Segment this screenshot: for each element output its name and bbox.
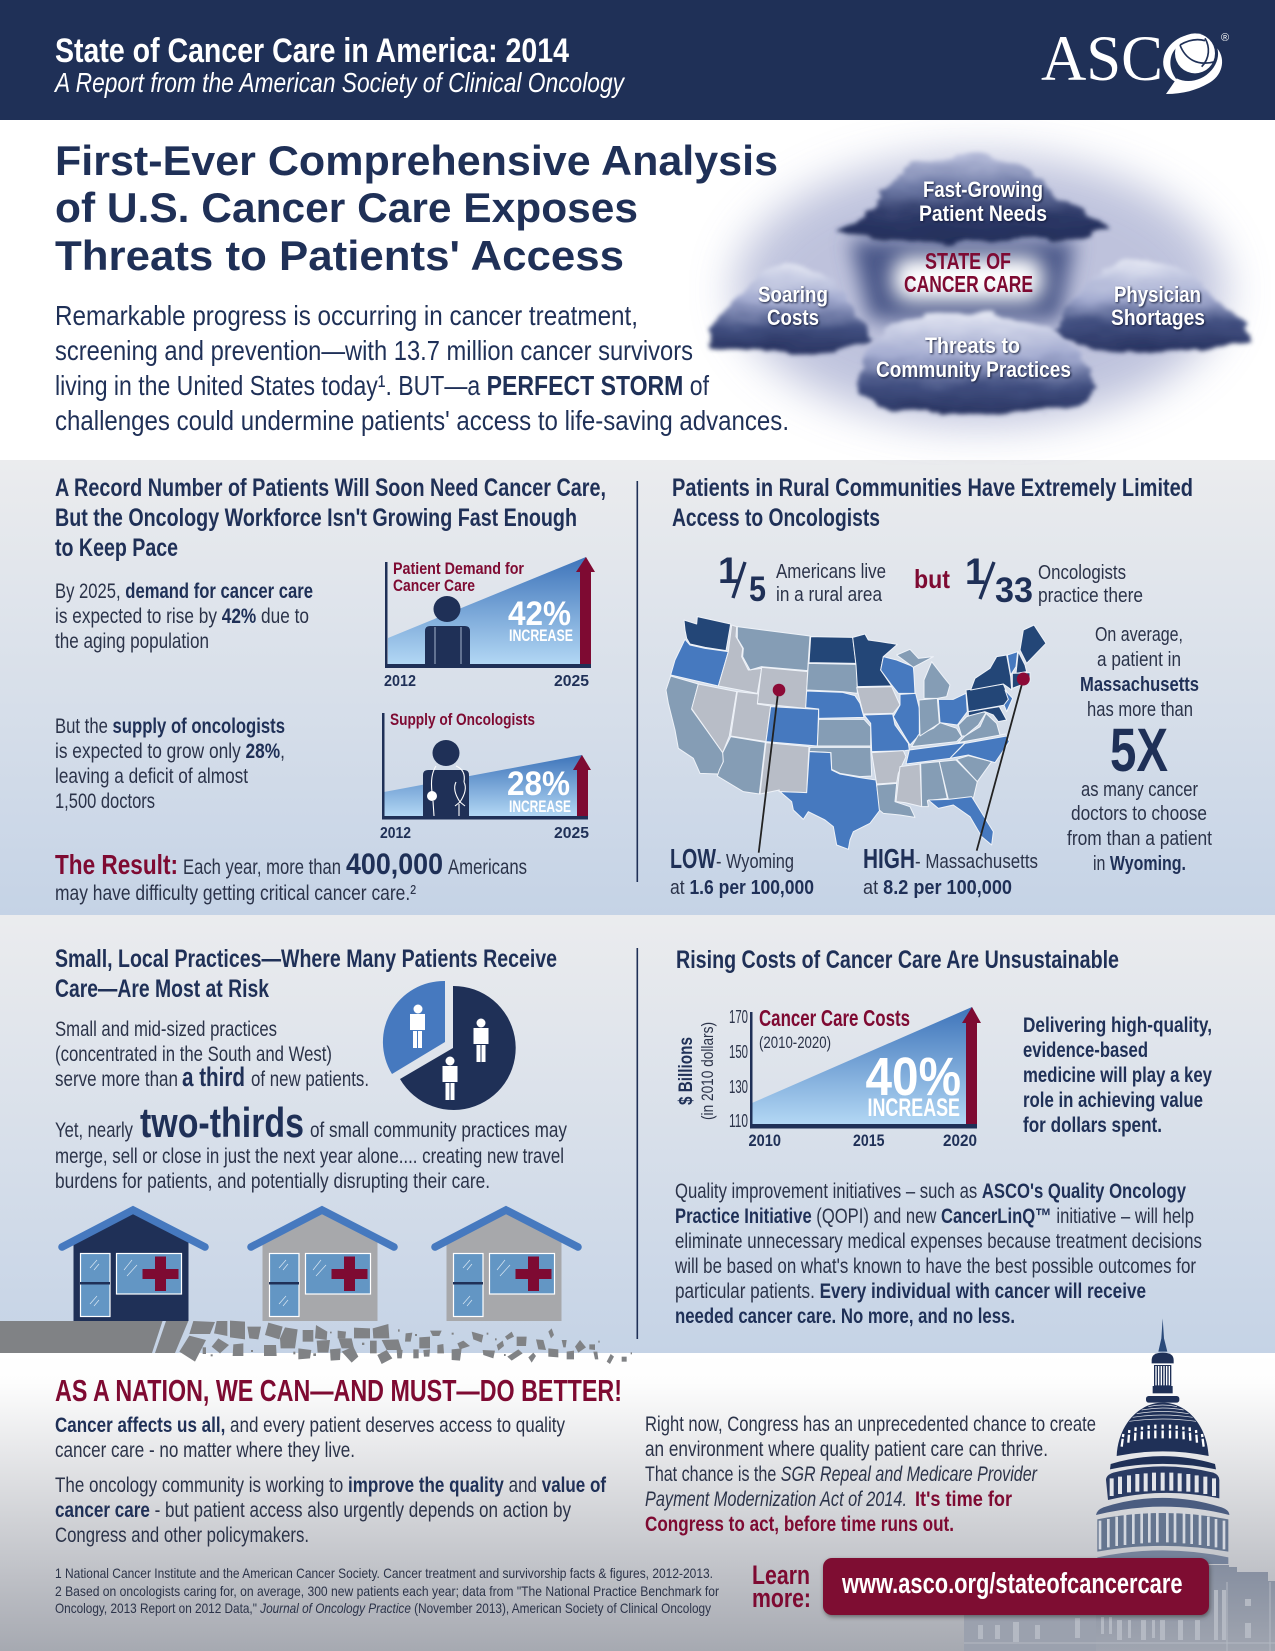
text: two-thirds at risk: burdens for patients, and potentially disrupting their care. <box>55 1170 490 1193</box>
icon: person <box>410 1004 425 1048</box>
callout: five times comparison: On average, <box>1095 623 1183 646</box>
text: cancer affects us all: Cancer affects us all, and every patient deserves access to quality <box>55 1414 565 1437</box>
building wings <box>964 1565 1275 1651</box>
band: first section background <box>0 460 1275 915</box>
chart: oncologist supply: INCREASE <box>509 797 571 816</box>
upper peristyle <box>1106 1466 1219 1500</box>
text: quality initiatives <box>674 1180 1202 1328</box>
chart: cancer care costs: (2010-2020) <box>759 1033 831 1052</box>
chart: patient demand: 42% <box>508 595 571 633</box>
chart: oncologist supply: 2012 <box>380 825 411 842</box>
text: congress: Right now, Congress has an unprecedented chance to create <box>645 1413 1096 1436</box>
callout: five times comparison: 5X <box>1110 716 1168 784</box>
stat: one thirty-third of oncologists: practice there <box>1038 585 1143 607</box>
callout: value for dollars: for dollars spent. <box>1023 1114 1162 1137</box>
intro paragraph: Remarkable progress is occurring in cancer treatment, <box>55 300 638 331</box>
text: congress: Payment Modernization Act of 2014. <box>645 1488 907 1511</box>
divider: bottom row <box>636 948 638 1339</box>
panel heading <box>55 945 557 1003</box>
text: oncology community: Congress and other policymakers. <box>55 1524 309 1547</box>
text: quality initiatives: Practice Initiative (QOPI) and new CancerLinQ™ initiative – will help <box>675 1205 1194 1228</box>
panel heading <box>55 474 606 562</box>
arrow: costs rise <box>962 1007 981 1124</box>
label: low: - Wyoming <box>716 851 794 873</box>
text: small practices share: a third <box>182 1062 245 1092</box>
center label: state of cancer care: STATE OF <box>925 248 1011 274</box>
panel heading: Access to Oncologists <box>672 504 880 532</box>
cloud: soaring costs <box>708 263 871 353</box>
label: high: - Massachusetts <box>915 851 1038 873</box>
pointer: Wyoming <box>759 693 778 853</box>
text: two-thirds at risk: of small community practices may <box>310 1119 567 1142</box>
header banner <box>0 0 1275 120</box>
panel heading: A Record Number of Patients Will Soon Need Cancer Care, <box>55 474 606 502</box>
cloud: fast-growing patient needs: Fast-Growing <box>923 177 1043 202</box>
chart: oncologist supply <box>380 710 591 842</box>
footnotes: Oncology, 2013 Report on 2012 Data," Journal of Oncology Practice (November 2013), American Society of Clinical Oncology <box>55 1600 711 1616</box>
connector word: but: but <box>914 564 950 594</box>
callout: value for dollars: medicine will play a key <box>1023 1064 1212 1087</box>
call to action heading: AS A NATION, WE CAN—AND MUST—DO BETTER! <box>55 1373 622 1408</box>
main headline: of U.S. Cancer Care Exposes <box>55 184 638 231</box>
panel: rising costs <box>674 946 1212 1328</box>
main headline: First-Ever Comprehensive Analysis <box>55 137 778 184</box>
arrow: demand rise <box>576 557 595 664</box>
callout: five times comparison: in Wyoming. <box>1093 852 1186 875</box>
text: supply: leaving a deficit of almost <box>55 765 248 788</box>
illustration: capitol building <box>964 1318 1275 1651</box>
panel heading: Care—Are Most at Risk <box>55 975 269 1003</box>
chart: cancer care costs: 150 <box>729 1042 748 1062</box>
cloud: soaring costs: Costs <box>767 305 819 330</box>
cloud: soaring costs: Soaring <box>758 282 828 307</box>
panel heading: to Keep Pace <box>55 534 178 562</box>
stat: one thirty-third of oncologists: 1 <box>965 551 986 592</box>
report subtitle: A Report from the American Society of Clinical Oncology <box>53 67 626 98</box>
panel: rural access <box>666 474 1212 899</box>
chart: cancer care costs: 2010 <box>748 1131 781 1150</box>
text: small practices share <box>55 1018 369 1092</box>
glow behind center label <box>893 257 1043 301</box>
footnotes: 1 National Cancer Institute and the American Cancer Society. Cancer treatment and survivorship facts & figures, 2012-2013. <box>55 1565 713 1581</box>
callout: five times comparison: as many cancer <box>1081 778 1198 801</box>
text: supply: is expected to grow only 28%, <box>55 740 285 763</box>
cracked ground <box>0 1321 632 1364</box>
text: demand: By 2025, demand for cancer care <box>55 580 313 603</box>
cloud: threats to community practices: Threats to <box>925 333 1020 358</box>
result callout: Americans <box>448 856 527 879</box>
callout: value for dollars: Delivering high-quality, <box>1023 1014 1212 1037</box>
callout: five times comparison: doctors to choose <box>1071 802 1207 825</box>
stat: one fifth of Americans: in a rural area <box>776 584 883 606</box>
stat: one fifth of Americans <box>718 550 886 609</box>
chart: cancer care costs: 2015 <box>853 1131 884 1150</box>
divider: top row <box>636 481 638 882</box>
intro paragraph: challenges could undermine patients' access to life-saving advances. <box>55 405 789 436</box>
chart: cancer care costs <box>676 1005 981 1150</box>
result callout: 400,000 <box>346 848 443 881</box>
text: quality initiatives: particular patients. Every individual with cancer will receive <box>675 1280 1146 1303</box>
text: supply <box>55 715 285 813</box>
icon: patient <box>425 596 470 664</box>
spire and lantern <box>1146 1318 1179 1403</box>
callout: five times comparison: a patient in <box>1097 648 1181 671</box>
dome <box>1117 1403 1209 1456</box>
chart: oncologist supply: 2025 <box>554 825 589 842</box>
stat: one thirty-third of oncologists: Oncologists <box>1038 562 1126 584</box>
cloud: physician shortages: Shortages <box>1111 305 1205 330</box>
intro paragraph: living in the United States today¹. BUT—a PERFECT STORM of <box>55 370 709 401</box>
panel: workforce demand and supply <box>55 474 606 905</box>
text: two-thirds at risk <box>55 1099 567 1193</box>
arrow: supply rise <box>573 755 591 816</box>
icon: oncologist with stethoscope <box>423 740 469 816</box>
band: second section background <box>0 915 1275 1353</box>
icon: person <box>474 1018 488 1062</box>
stat: one thirty-third of oncologists <box>965 551 1143 610</box>
text: congress: Congress to act, before time runs out. <box>645 1513 954 1536</box>
text: oncology community: cancer care - but patient access also urgently depends on action by <box>55 1499 571 1522</box>
label: low: at 1.6 per 100,000 <box>670 877 814 899</box>
icon: clinic open <box>62 1210 205 1321</box>
cloud: fast-growing patient needs <box>834 156 1112 242</box>
ASCO logo: ASC <box>1041 23 1163 95</box>
text: oncology community <box>55 1474 607 1547</box>
text: cancer affects us all: cancer care - no matter where they live. <box>55 1439 355 1462</box>
stat: one thirty-third of oncologists: 33 <box>995 571 1033 610</box>
callout: five times comparison: from than a patient <box>1067 827 1212 850</box>
stat: one fifth of Americans: 1 <box>718 550 739 591</box>
learn more label <box>752 1560 811 1613</box>
text: small practices share: of new patients. <box>251 1068 369 1091</box>
panel heading: Rising Costs of Cancer Care Are Unsustainable <box>676 946 1119 974</box>
result callout: may have difficulty getting critical cancer care.² <box>55 882 416 905</box>
dome collar <box>1110 1456 1216 1469</box>
storm cloud diagram <box>708 155 1250 425</box>
chart: cancer care costs: 170 <box>729 1007 748 1027</box>
text: congress: That chance is the SGR Repeal and Medicare Provider <box>645 1463 1038 1486</box>
stat: one fifth of Americans: 5 <box>749 570 766 609</box>
text: small practices share: Small and mid-sized practices <box>55 1018 277 1041</box>
report title: State of Cancer Care in America: 2014 <box>55 32 569 70</box>
center label: state of cancer care: CANCER CARE <box>904 271 1033 297</box>
stat: one fifth of Americans: Americans live <box>776 561 886 583</box>
intro paragraph: screening and prevention—with 13.7 million cancer survivors <box>55 335 693 366</box>
chart: cancer care costs: 110 <box>729 1111 748 1131</box>
text: two-thirds at risk: Yet, nearly <box>55 1119 133 1142</box>
text: two-thirds at risk: merge, sell or close in just the next year alone.... creating new travel <box>55 1145 564 1168</box>
result callout <box>55 848 527 905</box>
chart: oncologist supply: Supply of Oncologists <box>390 710 535 729</box>
label: low <box>670 843 814 899</box>
intro paragraph <box>55 300 789 436</box>
text: small practices share: (concentrated in the South and West) <box>55 1043 332 1066</box>
panel heading: Small, Local Practices—Where Many Patients Receive <box>55 945 557 973</box>
cloud: physician shortages: Physician <box>1114 282 1201 307</box>
footnotes <box>55 1565 719 1616</box>
text: demand: the aging population <box>55 630 209 653</box>
learn more label: more: <box>752 1583 811 1613</box>
result callout: Each year, more than <box>183 856 341 879</box>
label: low: LOW <box>670 843 716 874</box>
text: congress: It's time for <box>915 1488 1012 1511</box>
icon: person <box>442 1056 458 1100</box>
chart: oncologist supply: 28% <box>507 765 570 803</box>
cloud: fast-growing patient needs: Patient Needs <box>919 201 1047 226</box>
icon: clinic at risk <box>435 1210 578 1321</box>
pointer: Massachusetts <box>977 685 1022 851</box>
cloud: threats to community practices <box>859 313 1091 415</box>
panel heading: But the Oncology Workforce Isn't Growing Fast Enough <box>55 504 577 532</box>
map: oncologists per state <box>666 617 1046 853</box>
panel heading <box>672 474 1193 532</box>
text: demand <box>55 580 313 653</box>
text: demand: is expected to rise by 42% due to <box>55 605 309 628</box>
callout: value for dollars: evidence-based <box>1023 1039 1148 1062</box>
callout: five times comparison: Massachusetts <box>1080 673 1199 696</box>
text: quality initiatives: Quality improvement initiatives – such as ASCO's Quality Oncology <box>675 1180 1186 1203</box>
chart: cancer care costs: 130 <box>729 1077 748 1097</box>
chart: cancer care costs: (in 2010 dollars) <box>698 1022 717 1120</box>
callout: five times comparison <box>1067 623 1212 875</box>
learn more label: Learn <box>752 1560 810 1590</box>
chart: patient demand <box>384 557 595 690</box>
text: supply: 1,500 doctors <box>55 790 155 813</box>
ASCO logo: ® <box>1221 32 1229 44</box>
band: footer background <box>0 1353 1275 1651</box>
lower cornice <box>1096 1498 1229 1515</box>
main headline: Threats to Patients' Access <box>55 232 624 279</box>
chart: patient demand: Patient Demand for <box>393 559 524 578</box>
text: oncology community: The oncology community is working to improve the quality and value of <box>55 1474 607 1497</box>
chart: patient demand: INCREASE <box>509 626 573 645</box>
footnotes: 2 Based on oncologists caring for, on average, 300 new patients each year; data from "The National Practice Benchmark for <box>55 1583 719 1599</box>
callout: value for dollars <box>1023 1014 1212 1137</box>
text: congress <box>645 1413 1096 1536</box>
label: high <box>863 843 1038 899</box>
chart: cancer care costs: $ Billions <box>676 1037 697 1105</box>
text: two-thirds at risk: two-thirds <box>140 1099 304 1146</box>
chart: patient demand: Cancer Care <box>393 576 475 595</box>
text: supply: But the supply of oncologists <box>55 715 285 738</box>
text: cancer affects us all <box>55 1414 565 1462</box>
main headline <box>55 137 778 279</box>
cloud: threats to community practices: Community Practices <box>876 357 1071 382</box>
text: small practices share: serve more than <box>55 1068 178 1091</box>
panel: call to action <box>55 1373 1209 1616</box>
center label: state of cancer care <box>904 248 1033 297</box>
button: website <box>823 1558 1209 1615</box>
chart: cancer care costs: 2020 <box>943 1131 977 1150</box>
ASCO logo <box>1041 23 1229 95</box>
callout: value for dollars: role in achieving value <box>1023 1089 1203 1112</box>
result callout: The Result: <box>55 849 178 880</box>
cloud: physician shortages <box>1052 259 1250 351</box>
text: congress: an environment where quality patient care can thrive. <box>645 1438 1048 1461</box>
chart: patient demand: 2025 <box>554 673 589 690</box>
chart: cancer care costs: 40% <box>866 1047 961 1107</box>
callout: five times comparison: has more than <box>1087 698 1193 721</box>
text: quality initiatives: needed cancer care. No more, and no less. <box>675 1305 1015 1328</box>
pie chart: share of new patients <box>383 981 516 1110</box>
panel: small local practices <box>0 945 632 1364</box>
label: high: at 8.2 per 100,000 <box>863 877 1012 899</box>
lower peristyle <box>1097 1513 1228 1552</box>
chart: patient demand: 2012 <box>384 673 416 690</box>
icon: clinic at risk <box>251 1210 394 1321</box>
chart: cancer care costs: INCREASE <box>868 1094 960 1122</box>
label: high: HIGH <box>863 843 915 874</box>
chart: cancer care costs: Cancer Care Costs <box>759 1005 910 1031</box>
